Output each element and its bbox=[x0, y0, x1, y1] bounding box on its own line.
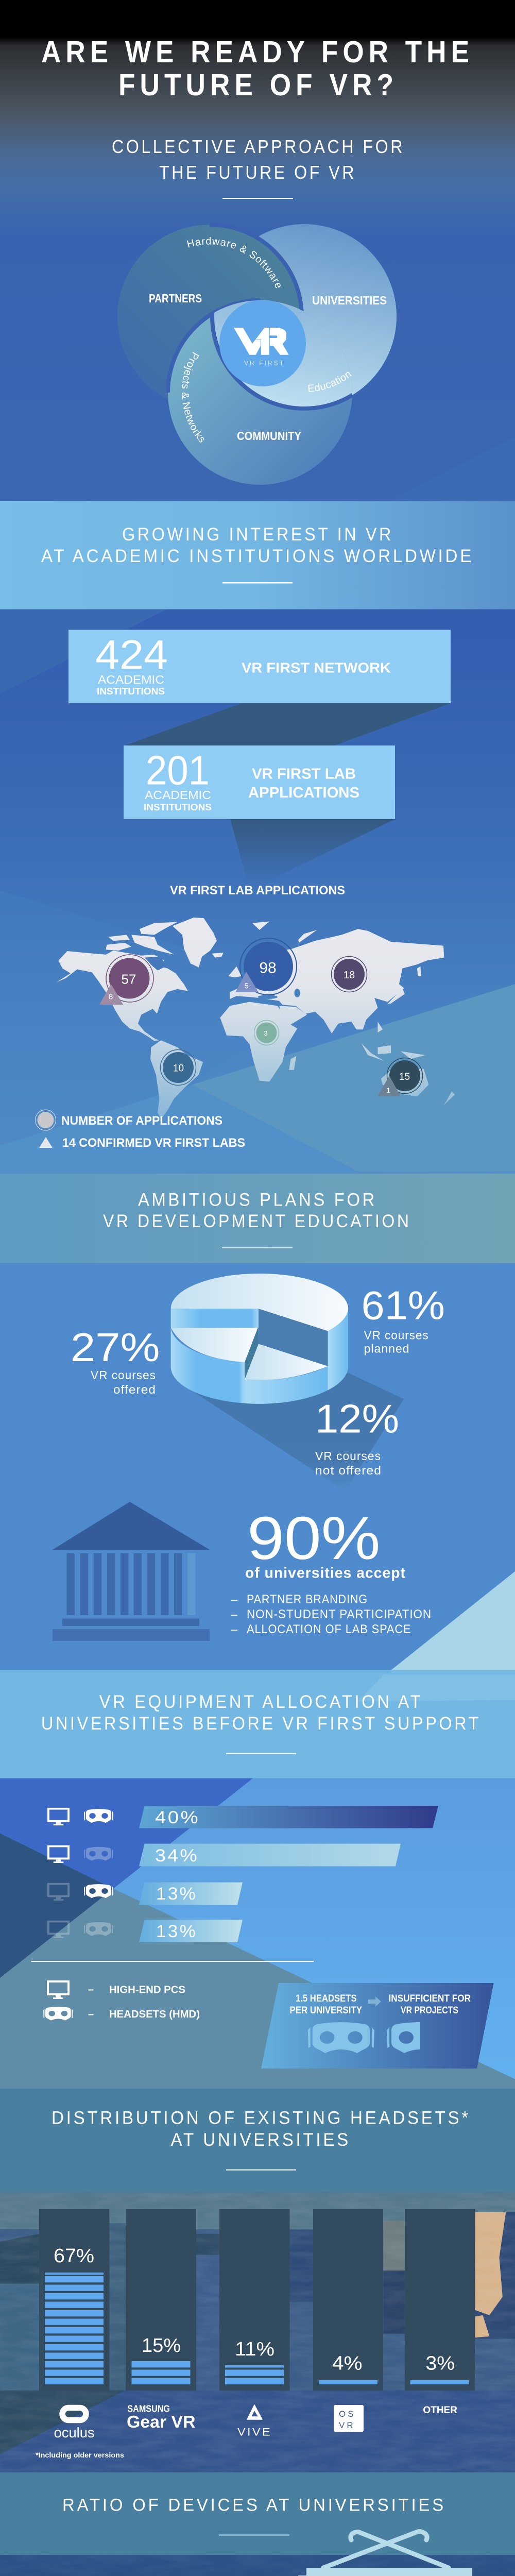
venn diagram: partners, universities, community: PARTNERS bbox=[149, 292, 202, 305]
photo background: device ratio bbox=[0, 2555, 515, 2576]
logo: OSVR bbox=[334, 2405, 364, 2432]
label: other: OTHER bbox=[423, 2405, 457, 2416]
venn diagram: partners, universities, community: Education bbox=[308, 372, 351, 392]
heading band: ambitious plans bbox=[0, 1174, 515, 1263]
stat box: 201 lab applications: 201 bbox=[146, 747, 210, 793]
map marker: 18 Asia bbox=[332, 956, 367, 992]
heading band: equipment allocation bbox=[0, 1670, 515, 1778]
heading: collective approach: COLLECTIVE APPROACH FOR bbox=[112, 136, 405, 157]
pie label: 12% not offered: 12% bbox=[315, 1396, 399, 1442]
title bbox=[41, 35, 474, 102]
map marker: 98 Europe, 5 labs: 98 bbox=[259, 959, 277, 976]
stat: 90% of universities accept: 90% bbox=[247, 1504, 380, 1572]
logo: Oculus bbox=[54, 2408, 95, 2441]
bar: other 3% bbox=[405, 2209, 475, 2391]
logo: Samsung Gear VR: SAMSUNG bbox=[127, 2404, 170, 2414]
bar: other 3%: 3% bbox=[425, 2352, 455, 2374]
venn diagram: partners, universities, community: Projects & Networks bbox=[182, 352, 204, 443]
venn diagram: partners, universities, community: Hardware & Software bbox=[186, 237, 281, 289]
stat: 90% of universities accept: – bbox=[231, 1607, 237, 1621]
heading band: equipment allocation: UNIVERSITIES BEFORE VR FIRST SUPPORT bbox=[41, 1714, 481, 1734]
map legend: 14 CONFIRMED VR FIRST LABS bbox=[62, 1136, 245, 1150]
callout: 1.5 headsets per university: INSUFFICIENT FOR bbox=[388, 1993, 471, 2004]
logo: OSVR: VR bbox=[339, 2420, 355, 2430]
map marker: 98 Europe, 5 labs bbox=[235, 938, 297, 995]
icon: AR glasses, 5% bbox=[298, 2532, 481, 2576]
legend: PCs and headsets: HIGH-END PCS bbox=[109, 1984, 185, 1995]
stat box: 424 VR First network bbox=[68, 630, 451, 745]
stat: 90% of universities accept: ALLOCATION OF LAB SPACE bbox=[247, 1622, 411, 1636]
stat: 90% of universities accept: PARTNER BRANDING bbox=[247, 1592, 368, 1606]
section background: education plans bbox=[0, 1263, 515, 1670]
center badge: VR First logo bbox=[219, 300, 306, 386]
heading band: growing interest: GROWING INTEREST IN VR bbox=[122, 524, 393, 545]
map marker: 57 North America, 8 labs bbox=[99, 955, 153, 1005]
heading band: equipment allocation: VR EQUIPMENT ALLOCATION AT bbox=[99, 1692, 423, 1712]
stat box: 424 VR First network: VR FIRST NETWORK bbox=[242, 659, 391, 676]
map marker: 15 Australia, 1 lab bbox=[377, 1058, 422, 1096]
icon: arrow bbox=[368, 1996, 381, 2007]
photo background: headset distribution bbox=[0, 2192, 515, 2473]
map marker: 3 Africa bbox=[254, 1020, 279, 1045]
bar: Vive 11%: 11% bbox=[235, 2338, 274, 2360]
heading band: growing interest bbox=[0, 501, 515, 609]
bar: Oculus 67%: 67% bbox=[54, 2245, 94, 2267]
callout: 1.5 headsets per university: PER UNIVERSITY bbox=[289, 2005, 362, 2016]
stat: 90% of universities accept: NON-STUDENT PARTICIPATION bbox=[247, 1607, 432, 1621]
pie label: 61% planned: VR courses bbox=[364, 1328, 429, 1342]
stat box: 201 lab applications: APPLICATIONS bbox=[248, 785, 359, 801]
map marker: 10 South America bbox=[161, 1050, 196, 1085]
stat: 90% of universities accept: – bbox=[231, 1592, 237, 1606]
row: 13% neither: 13% bbox=[156, 1922, 197, 1941]
pie label: 27% offered: 27% bbox=[71, 1325, 160, 1370]
footnote: *Including older versions bbox=[36, 2451, 124, 2459]
bar: Oculus 67% bbox=[39, 2209, 109, 2391]
stat: 90% of universities accept bbox=[231, 1504, 432, 1636]
pie label: 27% offered: offered bbox=[113, 1383, 156, 1396]
map marker: 57 North America, 8 labs: 57 bbox=[122, 972, 136, 987]
bar: Vive 11% bbox=[219, 2209, 289, 2391]
logo: Vive bbox=[237, 2405, 272, 2438]
heading band: growing interest: AT ACADEMIC INSTITUTIONS WORLDWIDE bbox=[41, 546, 474, 566]
bar: Samsung Gear VR 15% bbox=[126, 2209, 196, 2391]
legend: PCs and headsets: HEADSETS (HMD) bbox=[109, 2009, 200, 2020]
map marker: 10 South America: 10 bbox=[173, 1063, 184, 1074]
icon: university building bbox=[53, 1502, 210, 1641]
row: 13% neither bbox=[47, 1920, 243, 1942]
stat box: 201 lab applications: ACADEMIC bbox=[145, 788, 211, 802]
stat: 90% of universities accept: – bbox=[231, 1622, 237, 1636]
row: 34% PCs only: 34% bbox=[155, 1846, 199, 1866]
pie label: 61% planned bbox=[362, 1283, 445, 1355]
heading band: ambitious plans: VR DEVELOPMENT EDUCATION bbox=[103, 1211, 411, 1231]
row: 40% PCs and headsets: 40% bbox=[155, 1808, 200, 1827]
stat box: 424 VR First network: 424 bbox=[95, 632, 168, 677]
callout: 1.5 headsets per university: VR PROJECTS bbox=[401, 2005, 458, 2016]
background: top gradient and map section bbox=[0, 0, 515, 1174]
title: FUTURE OF VR? bbox=[118, 68, 398, 102]
venn diagram: partners, universities, community: UNIVERSITIES bbox=[312, 294, 387, 307]
map marker: 98 Europe, 5 labs: 5 bbox=[244, 982, 249, 991]
bar: OSVR 4% bbox=[313, 2209, 383, 2391]
logo: Samsung Gear VR bbox=[127, 2404, 196, 2431]
map marker: 3 Africa: 3 bbox=[264, 1029, 268, 1037]
logo: OSVR: OS bbox=[339, 2409, 356, 2419]
3D pie chart bbox=[171, 1274, 404, 1491]
row: 13% headsets only bbox=[47, 1883, 243, 1905]
heading: collective approach: THE FUTURE OF VR bbox=[159, 162, 356, 183]
pie label: 61% planned: planned bbox=[364, 1342, 410, 1355]
pie label: 12% not offered: not offered bbox=[315, 1464, 382, 1477]
bar: Samsung Gear VR 15%: 15% bbox=[142, 2335, 181, 2357]
heading band: headset distribution: DISTRIBUTION OF EXISTING HEADSETS* bbox=[52, 2108, 471, 2128]
pie label: 12% not offered bbox=[315, 1396, 399, 1477]
venn diagram: partners, universities, community: COMMUNITY bbox=[237, 429, 301, 443]
pie label: 12% not offered: VR courses bbox=[315, 1449, 381, 1463]
title: ARE WE READY FOR THE bbox=[41, 35, 474, 69]
row: 34% PCs only bbox=[47, 1844, 401, 1866]
logo: Oculus: oculus bbox=[54, 2425, 95, 2441]
map marker: 15 Australia, 1 lab: 15 bbox=[399, 1072, 410, 1082]
callout: 1.5 headsets per university bbox=[261, 1983, 494, 2069]
callout: 1.5 headsets per university: 1.5 HEADSETS bbox=[296, 1993, 357, 2004]
bar: OSVR 4%: 4% bbox=[332, 2352, 363, 2374]
logo: Samsung Gear VR: Gear VR bbox=[127, 2412, 196, 2431]
row: 13% headsets only: 13% bbox=[156, 1884, 197, 1904]
stat: 90% of universities accept: of universities accept bbox=[245, 1565, 406, 1582]
stat box: 201 lab applications bbox=[124, 745, 395, 881]
map marker: 57 North America, 8 labs: 8 bbox=[109, 993, 113, 1002]
legend: PCs and headsets: – bbox=[88, 1984, 94, 1995]
legend: PCs and headsets bbox=[43, 1980, 200, 2021]
stat box: 201 lab applications: VR FIRST LAB bbox=[252, 766, 356, 782]
section background: equipment allocation bbox=[0, 1778, 515, 2090]
heading band: device ratio: RATIO OF DEVICES AT UNIVERSITIES bbox=[62, 2496, 446, 2515]
stat box: 201 lab applications: INSTITUTIONS bbox=[144, 802, 212, 812]
logo: Vive: VIVE bbox=[237, 2427, 272, 2438]
heading band: headset distribution bbox=[0, 2089, 515, 2193]
heading band: ambitious plans: AMBITIOUS PLANS FOR bbox=[138, 1190, 377, 1210]
stat box: 424 VR First network: ACADEMIC bbox=[98, 673, 164, 686]
stat box: 424 VR First network: INSTITUTIONS bbox=[97, 686, 165, 697]
heading band: device ratio bbox=[0, 2472, 515, 2555]
map marker: 15 Australia, 1 lab: 1 bbox=[386, 1086, 390, 1095]
center badge: VR First logo: VR FIRST bbox=[244, 359, 285, 367]
heading: collective approach bbox=[112, 136, 405, 199]
world map bbox=[57, 918, 455, 1119]
pie label: 27% offered: VR courses bbox=[91, 1368, 156, 1382]
heading: world map: VR FIRST LAB APPLICATIONS bbox=[170, 884, 345, 897]
map marker: 18 Asia: 18 bbox=[344, 970, 355, 981]
heading band: headset distribution: AT UNIVERSITIES bbox=[171, 2130, 351, 2150]
pie label: 61% planned: 61% bbox=[362, 1283, 445, 1328]
row: 40% PCs and headsets bbox=[47, 1806, 438, 1828]
map legend: NUMBER OF APPLICATIONS bbox=[61, 1114, 222, 1128]
map legend bbox=[35, 1110, 245, 1150]
venn diagram: partners, universities, community bbox=[117, 224, 397, 485]
pie label: 27% offered bbox=[71, 1325, 160, 1396]
legend: PCs and headsets: – bbox=[88, 2009, 94, 2020]
